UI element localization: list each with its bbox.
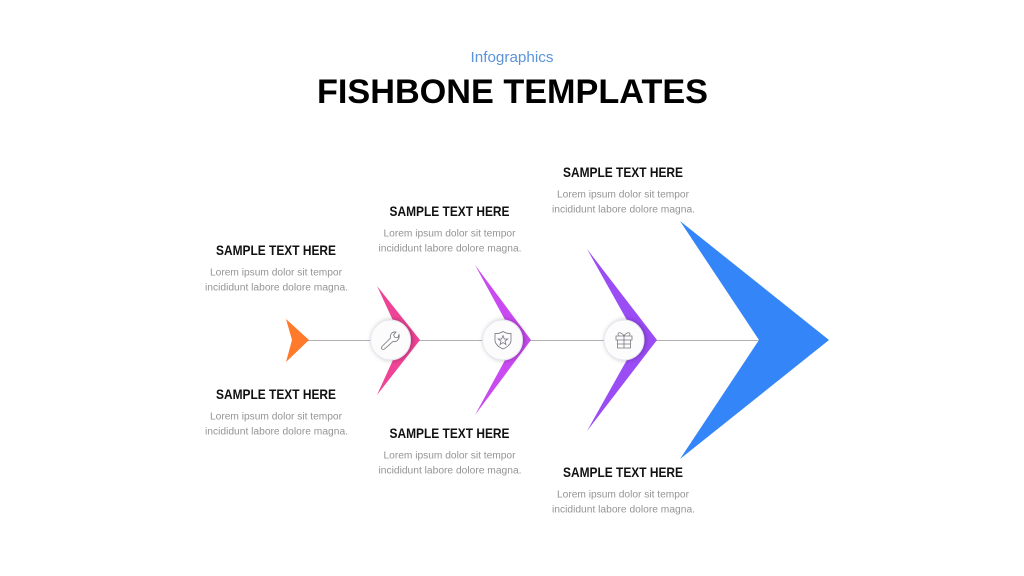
- spine line: [305, 340, 762, 342]
- text block: upper middle: SAMPLE TEXT HERE: [390, 203, 510, 219]
- title: FISHBONE TEMPLATES: [317, 73, 708, 111]
- arrow: pink bone: [377, 286, 420, 395]
- text block: lower right: [552, 464, 695, 516]
- text block: upper right: [552, 164, 695, 216]
- icon: shield with star in circle: [482, 320, 522, 360]
- text block: lower middle: [378, 425, 522, 476]
- text block: lower middle: incididunt labore dolore magna.: [378, 466, 522, 476]
- icon: gift in circle: [604, 320, 644, 360]
- arrow: orange tail: [286, 319, 309, 362]
- text block: lower left: incididunt labore dolore magna.: [205, 426, 348, 438]
- text block: upper left: [205, 242, 348, 294]
- text block: upper middle: [378, 203, 522, 254]
- text block: upper middle: Lorem ipsum dolor sit tempor: [384, 228, 516, 240]
- text block: lower left: Lorem ipsum dolor sit tempor: [210, 412, 343, 422]
- text block: lower right: incididunt labore dolore magna.: [552, 504, 695, 516]
- arrow: purple bone: [587, 249, 657, 431]
- text block: upper left: SAMPLE TEXT HERE: [216, 242, 336, 258]
- text block: lower middle: Lorem ipsum dolor sit tempor: [384, 450, 516, 462]
- text block: upper left: Lorem ipsum dolor sit tempor: [210, 268, 343, 278]
- arrow: magenta bone: [475, 265, 531, 415]
- text block: lower right: SAMPLE TEXT HERE: [563, 464, 683, 480]
- subtitle: Infographics: [470, 49, 554, 66]
- text block: lower left: SAMPLE TEXT HERE: [216, 386, 336, 402]
- text block: upper middle: incididunt labore dolore magna.: [378, 244, 522, 254]
- text block: lower right: Lorem ipsum dolor sit tempor: [557, 490, 690, 500]
- text block: lower left: [205, 386, 348, 438]
- text block: upper left: incididunt labore dolore magna.: [205, 282, 348, 294]
- text block: upper right: Lorem ipsum dolor sit tempor: [557, 190, 690, 200]
- text block: upper right: incididunt labore dolore magna.: [552, 204, 695, 216]
- icon: wrench in circle: [370, 320, 410, 360]
- text block: lower middle: SAMPLE TEXT HERE: [390, 425, 510, 441]
- arrow: blue head: [680, 221, 829, 459]
- text block: upper right: SAMPLE TEXT HERE: [563, 164, 683, 180]
